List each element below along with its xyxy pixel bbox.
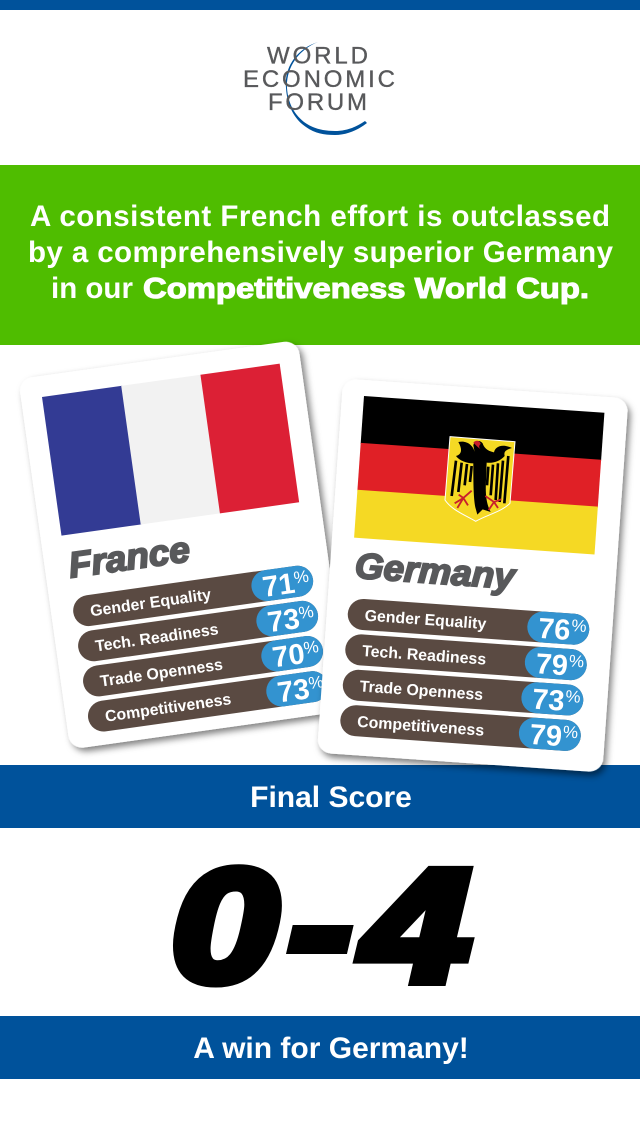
banner: win for Germany: A win for Germany!	[193, 1032, 469, 1065]
banner: final score	[0, 765, 640, 828]
stat: tech readiness: 73	[265, 603, 302, 639]
stat: trade openness: Trade Openness	[359, 678, 484, 704]
stat: competitiveness: 73	[275, 673, 312, 709]
flag: Germany	[354, 396, 604, 554]
logo: World Economic Forum: ECONOMIC	[243, 66, 395, 93]
stat: trade openness: Trade Openness	[99, 657, 224, 691]
stat: gender equality: 76	[537, 613, 571, 647]
logo: World Economic Forum: WORLD	[267, 42, 368, 70]
stat: competitiveness	[339, 704, 582, 754]
banner: final score: Final Score	[250, 781, 412, 814]
stat: gender equality: Gender Equality	[89, 586, 212, 620]
card: Germany	[317, 379, 628, 773]
stat: gender equality	[347, 598, 590, 648]
logo: World Economic Forum	[243, 42, 395, 135]
stat: trade openness: 70	[270, 638, 307, 674]
score: -	[288, 837, 352, 1015]
score: 0	[171, 837, 278, 1015]
stat: tech readiness	[344, 633, 588, 684]
stat: tech readiness: %	[297, 602, 315, 623]
flag: France	[42, 364, 299, 536]
stat: gender equality	[71, 564, 315, 631]
headline panel: A consistent French effort is outclassed	[30, 200, 610, 233]
stat: trade openness	[342, 669, 584, 719]
headline panel: in our	[51, 272, 133, 305]
stat: tech readiness	[76, 599, 320, 666]
stat: competitiveness: %	[307, 672, 325, 693]
stat: tech readiness: Tech. Readiness	[94, 621, 220, 655]
country name: France: France	[66, 528, 192, 586]
stat: tech readiness: 79	[535, 648, 569, 682]
stat: tech readiness: Tech. Readiness	[362, 643, 487, 669]
stat: competitiveness: Competitiveness	[357, 714, 485, 740]
icon: German coat of arms	[445, 437, 515, 521]
stat: competitiveness: Competitiveness	[104, 691, 232, 726]
headline panel	[0, 165, 640, 345]
stat: gender equality: 71	[261, 568, 297, 604]
stat: competitiveness: %	[562, 722, 579, 742]
stat: tech readiness: %	[568, 651, 585, 671]
banner: win for Germany	[0, 1016, 640, 1079]
card: France	[18, 340, 350, 749]
stat: gender equality: Gender Equality	[364, 608, 487, 633]
stat: trade openness: 73	[531, 684, 566, 718]
headline panel: Competitiveness World Cup.	[143, 273, 589, 305]
stat: gender equality: %	[292, 567, 310, 588]
top bar	[0, 0, 640, 10]
logo: World Economic Forum: FORUM	[268, 89, 367, 116]
stat: trade openness: %	[565, 687, 581, 707]
score	[171, 836, 471, 1015]
stat: competitiveness: 79	[529, 719, 563, 753]
headline panel: by a comprehensively superior Germany	[28, 236, 614, 269]
stat: trade openness: %	[302, 637, 320, 658]
stat: competitiveness	[86, 669, 330, 736]
country name: Germany: Germany	[354, 545, 518, 597]
stat: gender equality: %	[571, 616, 587, 636]
score: 4	[360, 836, 471, 1015]
stat: trade openness	[81, 634, 325, 701]
